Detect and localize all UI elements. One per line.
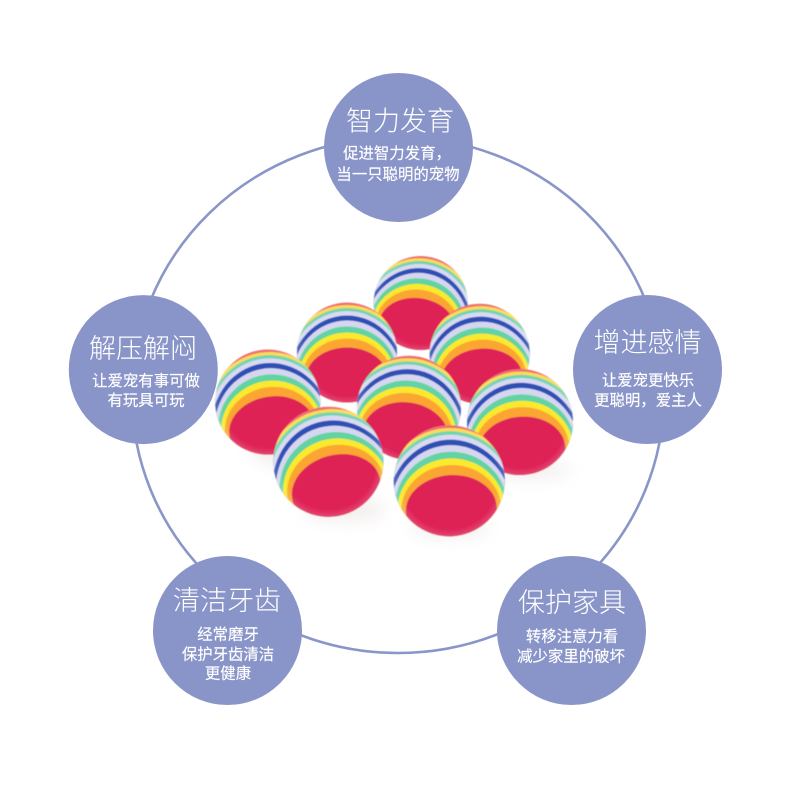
heading: 增进感情 bbox=[594, 328, 702, 358]
ball: upper left bbox=[281, 302, 413, 452]
heading: 智力发育 bbox=[346, 106, 454, 136]
ball: upper right bbox=[410, 298, 554, 459]
text block: 经常磨牙 bbox=[197, 626, 259, 644]
photo: rainbow balls bbox=[191, 248, 597, 596]
panel: 智力发育 bbox=[324, 73, 473, 222]
panel: 增进感情 bbox=[573, 295, 722, 444]
heading: 解压解闷 bbox=[89, 334, 197, 364]
text block: 有玩具可玩 bbox=[108, 392, 184, 410]
panel: 保护家具 bbox=[497, 556, 646, 705]
heading: 保护家具 bbox=[518, 588, 626, 618]
text block: 让爱宠有事可做 bbox=[92, 372, 200, 390]
ball: top bbox=[346, 248, 489, 404]
text block: 当一只聪明的宠物 bbox=[336, 166, 460, 184]
text block: 减少家里的破坏 bbox=[517, 648, 625, 666]
connecting ring bbox=[132, 137, 664, 653]
text block: 更健康 bbox=[205, 664, 251, 682]
text block: 让爱宠更快乐 bbox=[602, 372, 694, 390]
text block: 更聪明，爱主人 bbox=[594, 392, 702, 410]
ball: front left bbox=[243, 389, 428, 587]
heading: 清洁牙齿 bbox=[173, 586, 281, 616]
text block: 转移注意力看 bbox=[526, 626, 618, 646]
ball: far left bbox=[191, 339, 352, 516]
ball: front right bbox=[372, 420, 530, 596]
panel: 解压解闷 bbox=[69, 295, 218, 444]
text block: 促进智力发育， bbox=[343, 144, 451, 162]
ball: centre bbox=[328, 348, 483, 519]
text block: 保护牙齿清洁 bbox=[182, 646, 274, 664]
ball: far right bbox=[447, 364, 597, 532]
panel: 清洁牙齿 bbox=[153, 556, 302, 705]
